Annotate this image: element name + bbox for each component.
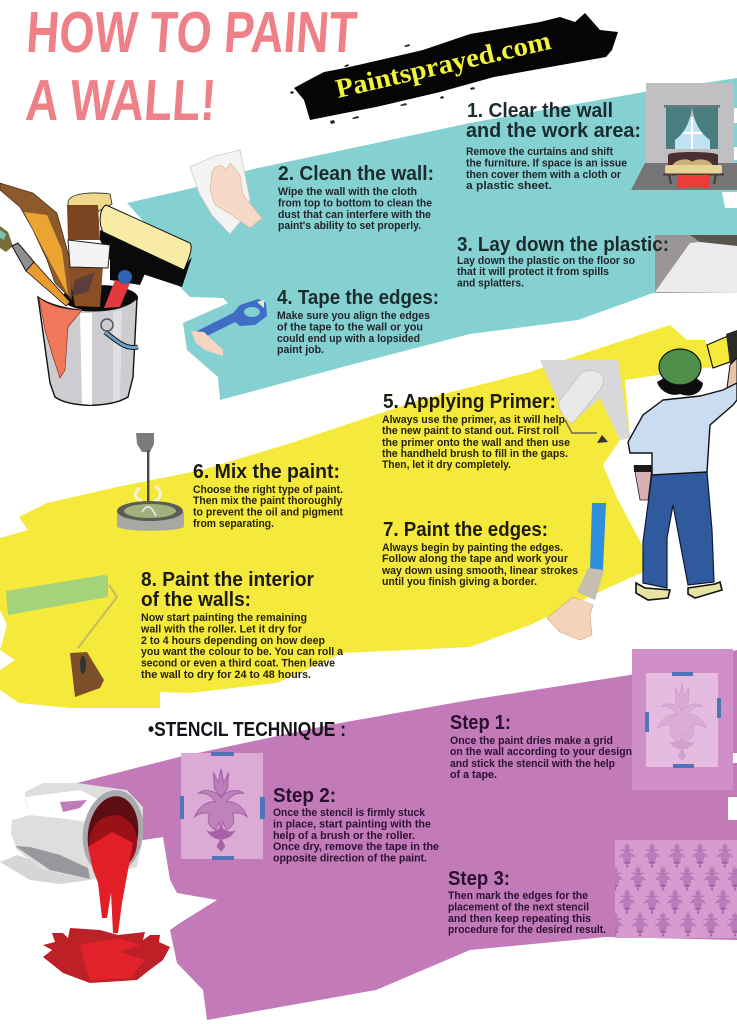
damask motif bbox=[658, 684, 706, 760]
stencil sheet bbox=[181, 753, 263, 859]
wall bbox=[646, 83, 734, 163]
step 3 stencil text: placement of the next stencil bbox=[448, 902, 589, 914]
brush ferrule bbox=[12, 243, 34, 271]
step 2 stencil text: in place, start painting with the bbox=[273, 818, 431, 830]
art brush bristle bbox=[0, 230, 6, 240]
red pool bbox=[43, 928, 170, 983]
icon: stencil on wall, step 1 bbox=[632, 649, 733, 790]
swirl arrows bbox=[136, 486, 160, 501]
floor shadow bbox=[0, 855, 90, 884]
black frame bbox=[110, 245, 150, 285]
step 6 text: Choose the right type of paint. bbox=[193, 484, 343, 496]
orange brush handle bbox=[26, 262, 70, 306]
step 5 text: the primer onto the wall and then use bbox=[382, 437, 570, 449]
tape edge bbox=[257, 300, 264, 308]
panel: yellow paint swath bbox=[0, 325, 713, 708]
handle tip bbox=[597, 435, 608, 443]
right tape bbox=[260, 797, 265, 819]
step 8 text: wall with the roller. Let it dry for bbox=[140, 624, 303, 636]
paint can at hip bbox=[634, 466, 652, 500]
hand bbox=[547, 597, 593, 640]
step 1 stencil text: of a tape. bbox=[450, 769, 497, 781]
white wall notches bbox=[734, 108, 737, 160]
step 1 stencil text: Step 1: bbox=[450, 712, 511, 734]
brown stem bbox=[67, 205, 100, 240]
red pour stream bbox=[88, 832, 133, 933]
step 3 stencil text bbox=[448, 868, 606, 936]
bucket handle ring bbox=[101, 319, 113, 331]
dark interior bbox=[83, 793, 143, 875]
red pen bbox=[104, 280, 130, 308]
window cross bbox=[673, 117, 710, 149]
right curtain bbox=[692, 107, 718, 149]
step 8 text: the wall to dry for 24 to 48 hours. bbox=[141, 669, 311, 681]
step 2 stencil text: opposite direction of the paint. bbox=[273, 852, 427, 864]
bucket shine bbox=[80, 313, 92, 405]
step 3 stencil text: Step 3: bbox=[448, 868, 510, 890]
brush grip bbox=[726, 330, 737, 364]
step 1 text: then cover them with a cloth or bbox=[466, 169, 622, 181]
pool bright tone bbox=[80, 938, 145, 980]
step 5 text: the new paint to stand out. First roll bbox=[382, 425, 559, 437]
bottom tape bbox=[212, 856, 234, 860]
primer patch bbox=[540, 360, 630, 440]
paint inside bbox=[124, 504, 176, 518]
step 2 stencil text bbox=[273, 785, 439, 864]
tape dispenser bbox=[197, 299, 267, 338]
pillows bbox=[672, 159, 713, 166]
heading: stencil technique: •STENCIL TECHNIQUE : bbox=[148, 719, 346, 741]
row 3 motifs bbox=[619, 889, 731, 914]
red blanket bbox=[677, 175, 709, 188]
roller bread top bbox=[68, 193, 112, 214]
blue pen cap bbox=[118, 270, 132, 284]
row 1 motifs bbox=[619, 843, 733, 868]
step 2 stencil text: Once the stencil is firmly stuck bbox=[273, 807, 426, 819]
top tape bbox=[672, 672, 693, 676]
bucket back bbox=[62, 285, 138, 311]
hand bbox=[191, 331, 223, 356]
floor bbox=[631, 163, 737, 190]
step 1 text: Remove the curtains and shift bbox=[466, 146, 613, 158]
step 2 text bbox=[278, 163, 434, 232]
hand bbox=[210, 163, 262, 228]
raised brush bbox=[707, 336, 730, 368]
rod bbox=[147, 450, 149, 502]
jeans bbox=[643, 472, 714, 588]
roller shadow bbox=[100, 230, 192, 287]
step 8 text: 2 to 4 hours depending on how deep bbox=[141, 635, 325, 647]
bucket opening rim bbox=[77, 786, 149, 880]
step 4 text: 4. Tape the edges: bbox=[277, 287, 439, 309]
window bbox=[673, 117, 710, 149]
pattern background bbox=[615, 840, 737, 938]
can rim bbox=[117, 501, 183, 521]
step 1 stencil text: on the wall according to your design bbox=[450, 746, 632, 758]
purple gap behind body bbox=[60, 800, 87, 812]
mid interior bbox=[85, 812, 141, 874]
step 2 text: Wipe the wall with the cloth bbox=[278, 186, 417, 198]
bucket handle bbox=[105, 332, 138, 348]
step 2 stencil text: Once dry, remove the tape in the bbox=[273, 841, 439, 853]
bucket right highlight bbox=[113, 310, 122, 402]
step 3 stencil text: procedure for the desired result. bbox=[448, 924, 606, 936]
ferrule bbox=[577, 568, 604, 600]
step 1 stencil text: Once the paint dries make a grid bbox=[450, 735, 613, 747]
right tape bbox=[717, 698, 721, 718]
website brush banner: Paintsprayed.com bbox=[333, 25, 554, 104]
step 2 text: paint's ability to set properly. bbox=[278, 220, 421, 232]
step 8 text: second or even a third coat. Then leave bbox=[141, 658, 335, 670]
step 3 text bbox=[457, 234, 669, 290]
orange paint drip bbox=[39, 298, 82, 378]
icon: painter's tape and hand bbox=[191, 299, 267, 356]
left tape bbox=[645, 712, 649, 732]
row 4 motifs bbox=[607, 912, 737, 937]
step 7 text: 7. Paint the edges: bbox=[383, 519, 548, 541]
step 2 text: dust that can interfere with the bbox=[278, 209, 431, 221]
step 8 text: of the walls: bbox=[141, 589, 251, 611]
step 4 text bbox=[277, 287, 439, 356]
step 7 text: Always begin by painting the edges. bbox=[382, 542, 563, 554]
step 8 text: you want the colour to be. You can roll a bbox=[141, 646, 344, 658]
icon: primer roller bbox=[540, 360, 630, 443]
mixing swirl bbox=[142, 507, 156, 516]
shirt bbox=[628, 383, 737, 475]
paint splatter bbox=[290, 44, 475, 124]
step 6 text: to prevent the oil and pigment bbox=[193, 506, 343, 518]
step 4 text: Make sure you align the edges bbox=[277, 310, 430, 322]
yellow roller bbox=[100, 205, 191, 270]
outer panel bbox=[632, 649, 733, 790]
dark lower stem detail bbox=[72, 272, 95, 296]
step 5 text: Then, let it dry completely. bbox=[382, 459, 511, 471]
bottom tape bbox=[673, 764, 694, 768]
icon: tools in bucket bbox=[0, 183, 192, 405]
feather tool bbox=[0, 183, 72, 300]
sheet bbox=[655, 242, 737, 293]
title: A WALL! bbox=[24, 68, 218, 133]
step 2 text: from top to bottom to clean the bbox=[278, 198, 432, 210]
panel: purple paint swath bbox=[61, 650, 737, 1020]
step 3 stencil text: and then keep repeating this bbox=[448, 913, 591, 925]
icon: painted stencil, step 2 bbox=[180, 752, 265, 860]
step 6 text: 6. Mix the paint: bbox=[193, 461, 340, 483]
row 2 motifs bbox=[607, 866, 737, 891]
step 7 text: until you finish giving a border. bbox=[382, 576, 537, 588]
cloth bbox=[190, 150, 250, 234]
icon: paint mixer bbox=[117, 433, 184, 531]
step 2 stencil text: Step 2: bbox=[273, 785, 336, 807]
wire frame bbox=[78, 585, 117, 648]
roller sleeve bbox=[6, 575, 108, 615]
handle socket bbox=[80, 656, 86, 674]
step 3 text: Lay down the plastic on the floor so bbox=[457, 255, 635, 267]
left tape bbox=[180, 796, 184, 819]
white band bbox=[25, 790, 100, 822]
bucket body bbox=[11, 783, 143, 880]
icon: paint brush in hand bbox=[547, 503, 606, 640]
step 2 stencil text: help of a brush or the roller. bbox=[273, 830, 415, 842]
can body bbox=[117, 512, 184, 531]
step 4 text: could end up with a lopsided bbox=[277, 333, 420, 345]
step 4 text: of the tape to the wall or you bbox=[277, 322, 423, 334]
title bbox=[20, 0, 359, 133]
brown handle bbox=[70, 652, 104, 697]
dark top bbox=[690, 235, 737, 246]
step 1 text: the furniture. If space is an issue bbox=[466, 158, 627, 170]
bucket handle blue bbox=[105, 332, 138, 348]
left curtain bbox=[666, 107, 692, 149]
step 1 stencil text: and stick the stencil with the help bbox=[450, 758, 615, 770]
tape hole bbox=[244, 307, 260, 317]
step 2 text: 2. Clean the wall: bbox=[278, 163, 434, 185]
drill head bbox=[136, 433, 154, 452]
title: HOW TO PAINT bbox=[24, 0, 359, 65]
left shoe bbox=[636, 583, 670, 600]
icon: green paint roller bbox=[6, 575, 117, 697]
stencil sheet bbox=[646, 673, 718, 767]
website brush banner bbox=[290, 13, 618, 124]
art brush tip bbox=[0, 226, 13, 252]
step 8 text: Now start painting the remaining bbox=[141, 612, 307, 624]
step 7 text: Follow along the tape and work your bbox=[382, 553, 569, 565]
icon: room with window and bed bbox=[631, 83, 737, 190]
roller bbox=[558, 371, 603, 423]
bed frame bbox=[663, 174, 724, 184]
step 1 text: a plastic sheet. bbox=[466, 180, 552, 192]
step 3 stencil text: Then mark the edges for the bbox=[448, 890, 588, 902]
step 6 text: Then mix the paint thoroughly bbox=[193, 495, 343, 507]
step 1 text: 1. Clear the wall bbox=[467, 100, 613, 122]
step 6 text bbox=[193, 461, 343, 530]
step 1 text bbox=[466, 100, 641, 192]
wire handle bbox=[565, 420, 597, 433]
icon: repeated stencil pattern bbox=[615, 840, 737, 938]
icon: painter figure bbox=[628, 330, 737, 600]
step 3 text: that it will protect it from spills bbox=[457, 266, 609, 278]
step 3 text: 3. Lay down the plastic: bbox=[457, 234, 669, 256]
icon: cloth and hand bbox=[190, 150, 262, 234]
panel: teal paint swath bbox=[127, 78, 737, 400]
step 8 text: 8. Paint the interior bbox=[141, 569, 314, 591]
step 5 text bbox=[382, 391, 570, 471]
hair collar bbox=[657, 378, 703, 396]
bucket body bbox=[38, 297, 137, 405]
green cap bbox=[659, 349, 701, 385]
step 7 text: way down using smooth, linear strokes bbox=[381, 565, 578, 577]
step 6 text: from separating. bbox=[193, 518, 274, 530]
gray wall bbox=[655, 235, 737, 293]
mattress bbox=[665, 165, 722, 174]
step 1 stencil text bbox=[450, 712, 632, 781]
feather highlight bbox=[24, 212, 68, 295]
step 3 text: and splatters. bbox=[457, 278, 524, 290]
step 8 text bbox=[140, 569, 344, 681]
blue handle bbox=[590, 503, 606, 570]
step 5 text: 5. Applying Primer: bbox=[383, 391, 556, 413]
step 7 text bbox=[381, 519, 578, 588]
curtain rod bbox=[664, 105, 720, 108]
bucket lower shadow bbox=[15, 846, 90, 879]
step 1 text: and the work area: bbox=[466, 120, 641, 142]
right shoe bbox=[688, 582, 722, 598]
step 4 text: paint job. bbox=[277, 344, 324, 356]
icon: tipped bucket pouring red paint bbox=[0, 783, 170, 983]
top tape bbox=[211, 752, 234, 756]
headboard bbox=[668, 152, 718, 168]
brown lower stem bbox=[68, 266, 103, 307]
icon: plastic sheet bbox=[655, 235, 737, 293]
damask motif bbox=[195, 769, 247, 851]
step 5 text: Always use the primer, as it will help bbox=[382, 414, 565, 426]
paint can top bbox=[634, 465, 652, 472]
step 5 text: the handheld brush to fill in the gaps. bbox=[382, 448, 568, 460]
white tape bbox=[68, 240, 110, 268]
forearm bbox=[727, 358, 737, 390]
